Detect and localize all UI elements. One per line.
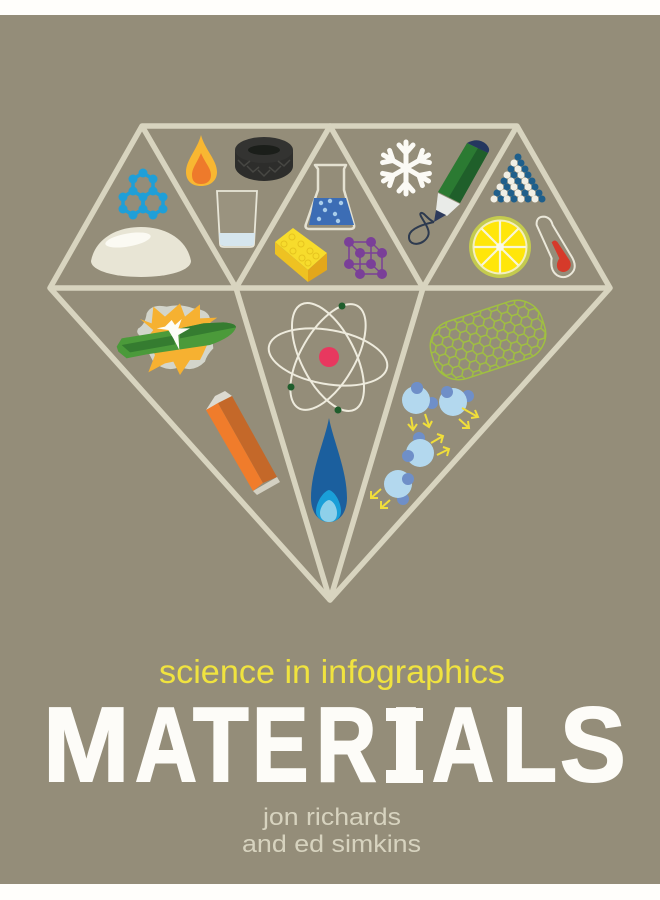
icon: flame <box>186 135 217 186</box>
icon: crystal lattice <box>344 237 387 279</box>
icon: marker pen <box>409 140 489 244</box>
icon: yellow toy brick <box>275 228 327 282</box>
title: T <box>193 686 248 804</box>
icon: atom <box>264 292 392 422</box>
icon: white dome <box>91 227 191 277</box>
title: R <box>316 686 376 804</box>
authors <box>242 804 421 858</box>
icon: graphene molecule <box>118 168 168 220</box>
icon: glass of water <box>217 191 257 247</box>
title: E <box>252 686 309 804</box>
title: I <box>389 686 423 804</box>
icon: triangle of spheres <box>490 154 546 202</box>
icon: exploding airship <box>117 303 236 375</box>
icon: tyre <box>235 137 293 181</box>
icon: battery <box>206 391 280 495</box>
title: A <box>432 686 494 804</box>
icon: lemon slice <box>469 216 531 278</box>
authors: jon richards <box>262 804 401 831</box>
icon: snowflake <box>380 142 432 194</box>
icon: thermometer <box>537 217 575 277</box>
icon: blue gas flame <box>311 418 347 522</box>
title <box>43 686 626 804</box>
title: S <box>560 686 626 804</box>
diamond frame <box>50 126 610 600</box>
heading: series name: science in infographics <box>159 653 505 690</box>
icon: moving molecules with arrows <box>371 382 478 508</box>
authors: and ed simkins <box>242 831 421 858</box>
title: M <box>43 686 130 804</box>
icon: carbon nanotube <box>430 300 546 380</box>
title: A <box>134 686 197 804</box>
title: L <box>502 686 557 804</box>
icon: flask <box>306 165 354 229</box>
